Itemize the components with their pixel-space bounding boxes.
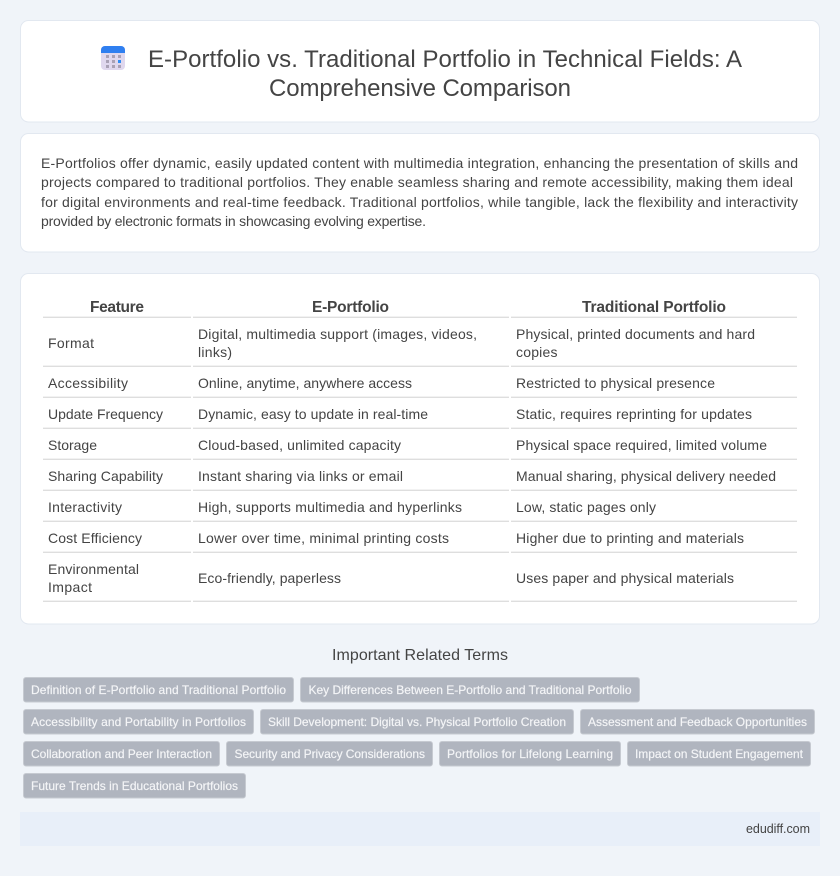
text block: introduction paragraph: provided by electronic formats in showcasing evolving expertise. (41, 213, 426, 229)
table row: accessibility: Restricted to physical presence (516, 375, 715, 391)
title: Comprehensive Comparison (269, 75, 571, 102)
table row: sharing capability: Manual sharing, physical delivery needed (516, 468, 776, 484)
heading: important related terms: Important Related Terms (332, 647, 508, 664)
table row: accessibility: Accessibility (48, 375, 128, 391)
table row: cost efficiency: Higher due to printing and materials (516, 530, 744, 546)
table row: storage: Storage (48, 437, 97, 453)
table row: update frequency: Update Frequency (48, 406, 163, 422)
table header row: E-Portfolio (312, 299, 389, 316)
table row: cost efficiency: Lower over time, minimal printing costs (198, 530, 449, 546)
table row: format: copies (516, 344, 558, 360)
table row: accessibility (48, 375, 715, 391)
table header row: Feature (90, 299, 144, 316)
footer source text: edudiff.com (746, 822, 810, 836)
table row: storage: Physical space required, limited volume (516, 437, 767, 453)
table row: update frequency (48, 406, 752, 422)
table row: interactivity: Low, static pages only (516, 499, 656, 515)
chip: Key Differences Between E-Portfolio and Traditional Portfolio (308, 683, 632, 697)
table row: accessibility: Online, anytime, anywhere access (198, 375, 412, 391)
chip: Definition of E-Portfolio and Traditional Portfolio (31, 683, 286, 697)
table row: environmental impact (48, 561, 734, 595)
chip: Future Trends in Educational Portfolios (31, 779, 238, 793)
title (148, 46, 742, 102)
chip (260, 710, 574, 734)
table row: storage (48, 437, 767, 453)
text block: introduction paragraph: E-Portfolios offer dynamic, easily updated content with multimedia integration, enhancing the presentation of skills and (41, 155, 798, 171)
table header row (90, 299, 726, 316)
table row: format (48, 326, 755, 360)
chip (24, 710, 254, 734)
title: E-Portfolio vs. Traditional Portfolio in Technical Fields: A (148, 46, 742, 73)
panel: related term chips (24, 678, 814, 798)
text block: introduction paragraph: projects compared to traditional portfolios. They enable seamless sharing and remote accessibility, making them ideal (41, 174, 793, 190)
panel: comparison table (20, 274, 820, 624)
text block: introduction paragraph (41, 155, 798, 229)
chip: Security and Privacy Considerations (234, 747, 425, 761)
chip (226, 742, 432, 766)
table row: update frequency: Dynamic, easy to update in real-time (198, 406, 428, 422)
chip (440, 742, 620, 766)
panel: header (20, 20, 820, 122)
panel: introduction (20, 134, 820, 252)
table row: sharing capability: Instant sharing via links or email (198, 468, 403, 484)
table row: environmental impact: Environmental (48, 561, 139, 577)
table row: format: Physical, printed documents and hard (516, 326, 755, 342)
chip: Collaboration and Peer Interaction (31, 747, 212, 761)
table row: interactivity (48, 499, 656, 515)
table row: format: links) (198, 344, 232, 360)
chip: Portfolios for Lifelong Learning (447, 747, 613, 761)
table row: update frequency: Static, requires reprinting for updates (516, 406, 752, 422)
table header row: Traditional Portfolio (582, 299, 726, 316)
chip (628, 742, 810, 766)
chip (24, 678, 294, 702)
chip (300, 678, 640, 702)
table row: interactivity: Interactivity (48, 499, 122, 515)
chip (24, 774, 246, 798)
chip: Accessibility and Portability in Portfolios (31, 715, 246, 729)
table row: environmental impact: Impact (48, 579, 92, 595)
chip (580, 710, 814, 734)
icon: calendar (101, 46, 125, 70)
chip: Skill Development: Digital vs. Physical Portfolio Creation (268, 715, 566, 729)
chip (24, 742, 220, 766)
table row: cost efficiency: Cost Efficiency (48, 530, 142, 546)
text block: introduction paragraph: for digital environments and real-time feedback. Traditional portfolios, while tangible, lack the flexibility and interactivity (41, 194, 798, 210)
table row: sharing capability (48, 468, 776, 484)
table row: sharing capability: Sharing Capability (48, 468, 163, 484)
chip: Impact on Student Engagement (635, 747, 804, 761)
panel: footer (20, 812, 820, 846)
table row: format: Format (48, 335, 94, 351)
chip: Assessment and Feedback Opportunities (588, 715, 807, 729)
table row: format: Digital, multimedia support (images, videos, (198, 326, 477, 342)
table row: cost efficiency (48, 530, 744, 546)
table row: environmental impact: Uses paper and physical materials (516, 570, 734, 586)
table row: storage: Cloud-based, unlimited capacity (198, 437, 401, 453)
table row: interactivity: High, supports multimedia and hyperlinks (198, 499, 462, 515)
table row: environmental impact: Eco-friendly, paperless (198, 570, 341, 586)
